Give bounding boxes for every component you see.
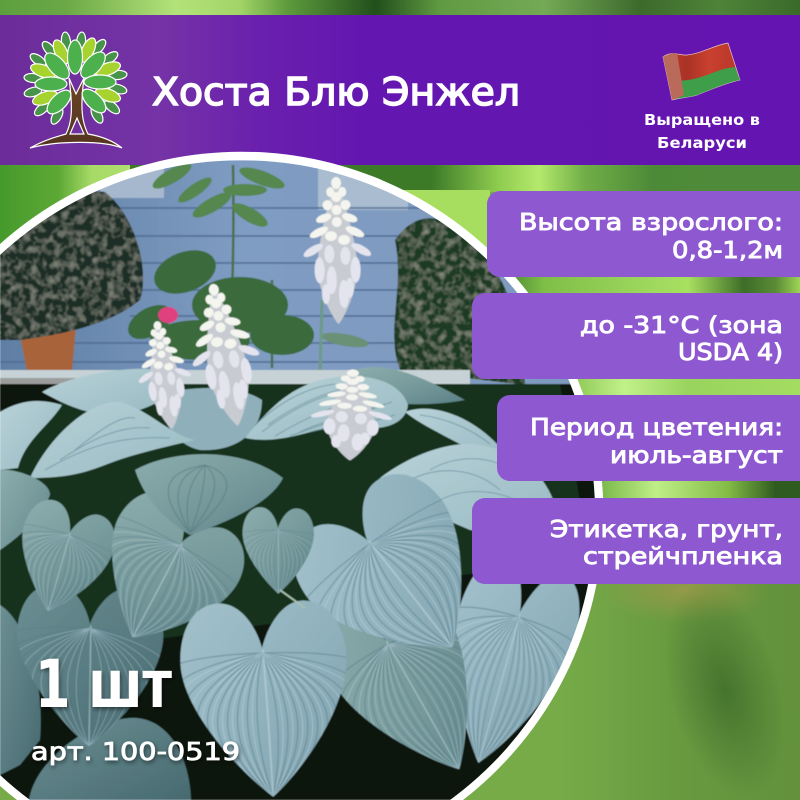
circular plant photo bbox=[0, 159, 618, 800]
icon: Belarus flag bbox=[663, 43, 740, 100]
card: package contents bbox=[472, 498, 800, 584]
dark ivy bush right bbox=[394, 218, 525, 385]
rear pale hosta leaves bbox=[0, 367, 560, 550]
logo: tree bbox=[23, 32, 128, 148]
white flower spikes bbox=[129, 176, 396, 462]
title: Хоста Блю Энжел bbox=[152, 70, 520, 114]
card: flowering period: июль-август bbox=[610, 443, 783, 469]
green shrubs behind bbox=[122, 159, 370, 375]
made in Belarus label: Выращено в bbox=[644, 111, 760, 129]
blue wooden wall bbox=[0, 160, 600, 390]
quantity: 1 шт bbox=[35, 646, 172, 723]
purple header band bbox=[0, 15, 800, 165]
white sill and gravel bbox=[0, 369, 471, 385]
article number: арт. 100-0519 bbox=[31, 737, 240, 766]
card: package contents: Этикетка, грунт, bbox=[550, 517, 783, 543]
clay pot bbox=[20, 329, 76, 370]
foreground blue hosta leaves bbox=[0, 434, 618, 800]
made in Belarus label bbox=[644, 111, 760, 152]
tree trunk and ground bbox=[30, 78, 122, 148]
dark ground bbox=[0, 384, 600, 800]
card: height: Высота взрослого: bbox=[519, 210, 783, 236]
dark bush left bbox=[0, 191, 143, 340]
card: frost hardiness bbox=[472, 293, 800, 379]
card: frost hardiness: до -31°C (зона bbox=[580, 313, 783, 339]
made in Belarus label: Беларуси bbox=[657, 134, 747, 152]
card: package contents: стрейчпленка bbox=[583, 544, 783, 570]
leaves dark bbox=[23, 32, 128, 126]
white circle frame bbox=[0, 152, 603, 800]
card: height bbox=[487, 191, 800, 277]
leaves lime bbox=[29, 36, 122, 108]
card: flowering period bbox=[497, 395, 800, 481]
card: height: 0,8-1,2м bbox=[672, 238, 783, 264]
card: frost hardiness: USDA 4) bbox=[678, 340, 783, 366]
upper centre leaf bbox=[135, 454, 283, 535]
card: flowering period: Период цветения: bbox=[530, 415, 783, 441]
leaves inner bbox=[35, 40, 116, 118]
